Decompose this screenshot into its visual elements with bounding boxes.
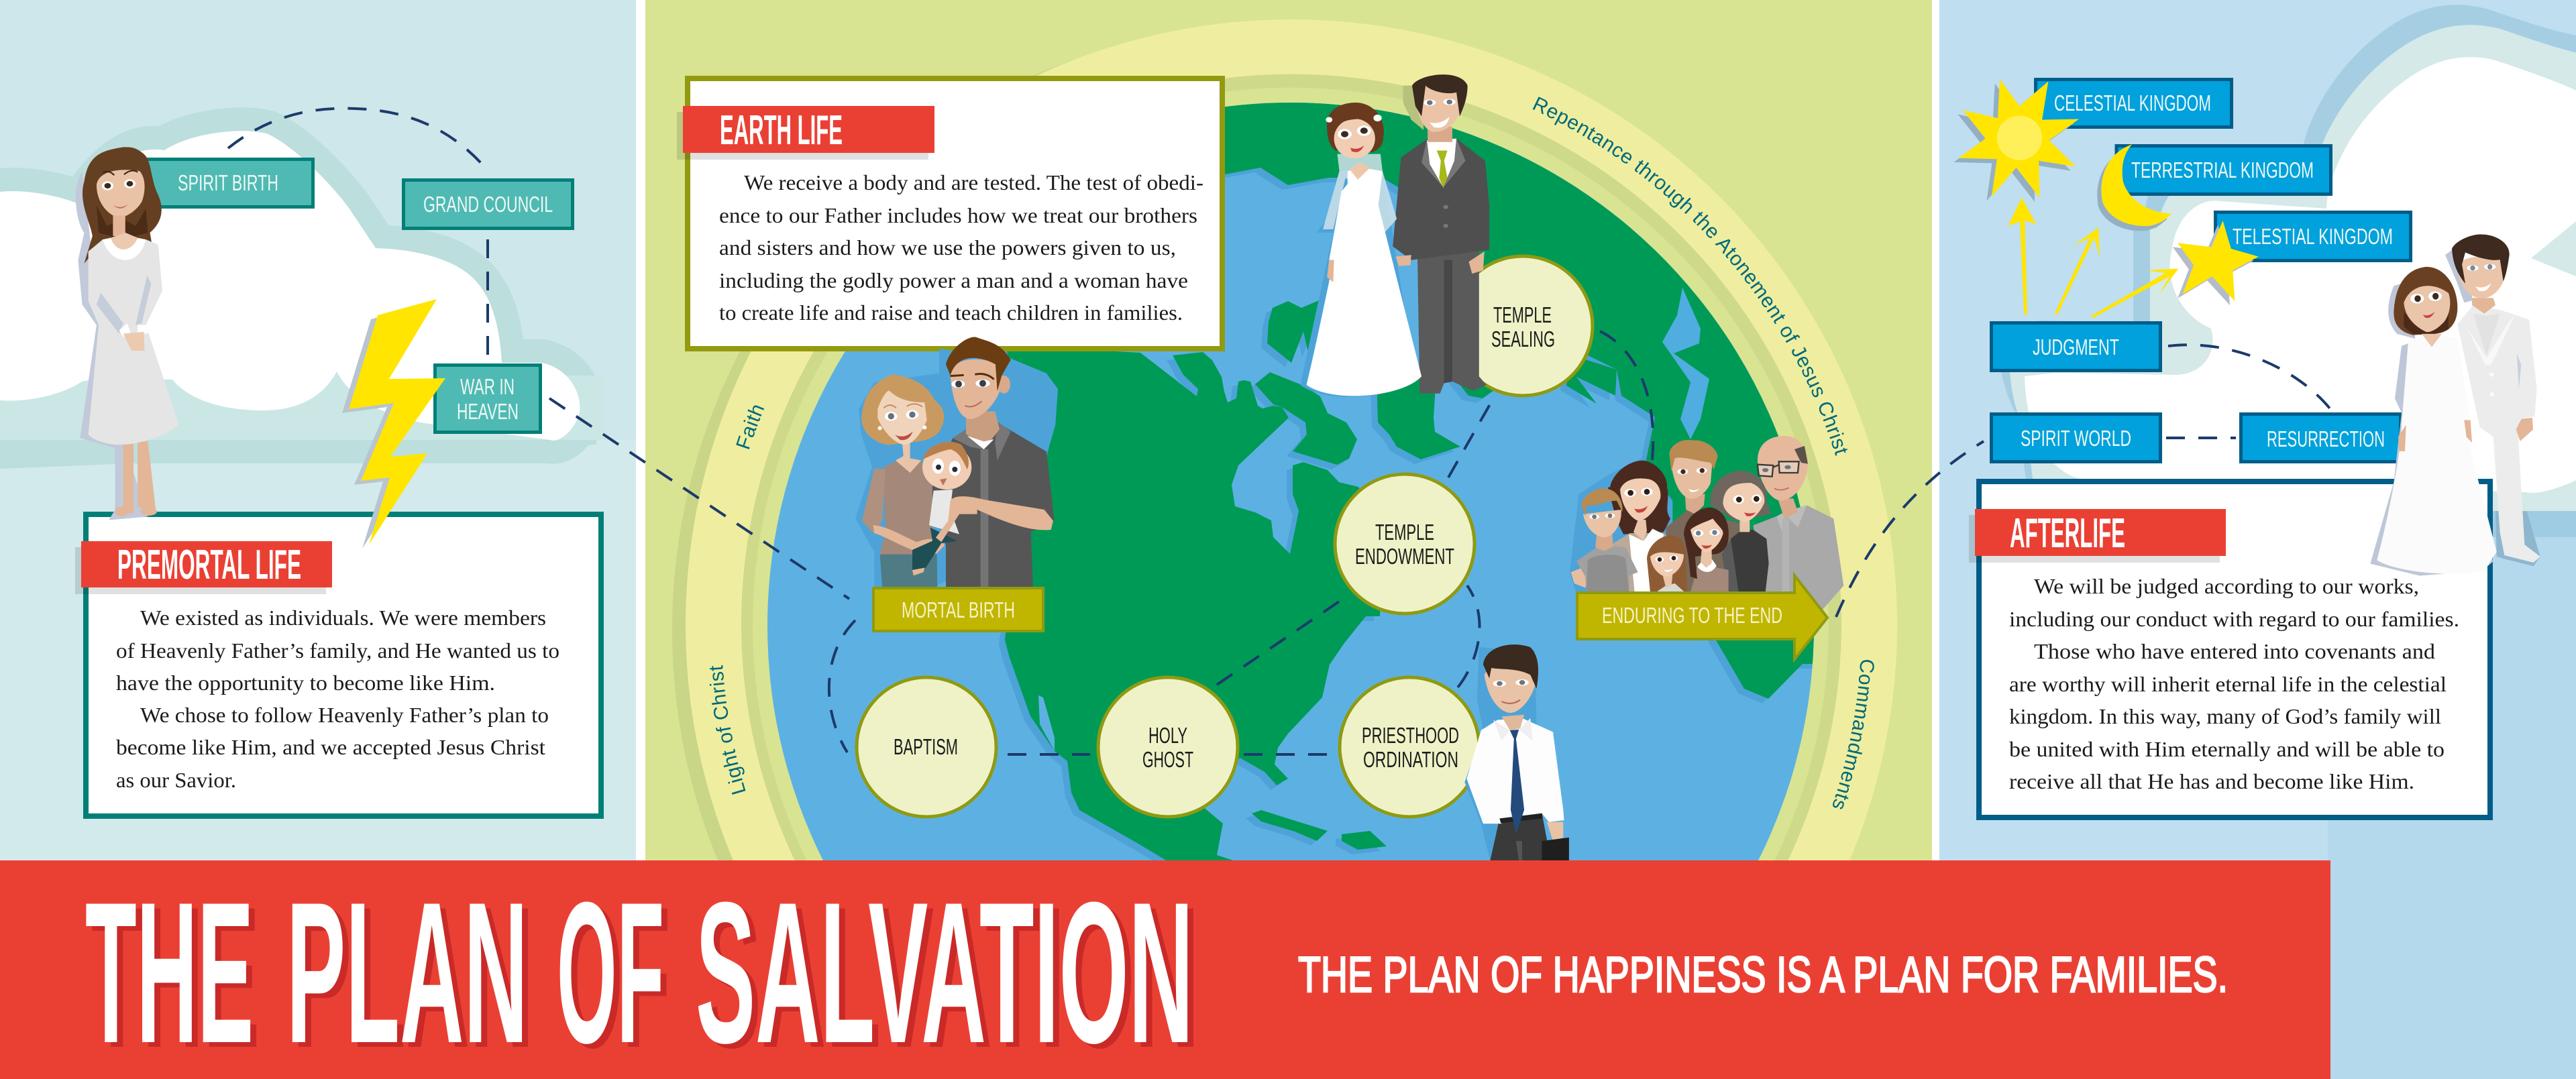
panel: earth life text box: including the godly power a man and a woman have: [719, 268, 1188, 292]
ring label: Commandments: Commandments: [1833, 660, 1874, 809]
panel: earth life text box: We receive a body and are tested. The test of obedi-: [744, 170, 1203, 194]
icons: sun, moon, star and arrows: [1953, 79, 2259, 318]
circle: temple sealing: SEALING: [1491, 327, 1555, 351]
circle: holy ghost: HOLY: [1148, 723, 1187, 748]
panel: premortal background: [0, 0, 636, 872]
figure: extended family: [1570, 436, 1843, 612]
box: spirit birth: [144, 160, 313, 207]
panel: earth life text box: and sisters and how we use the powers given to us,: [719, 235, 1176, 260]
circle: priesthood ordination: ORDINATION: [1363, 747, 1458, 772]
circle: baptism: [857, 677, 996, 817]
title: the plan of salvation: THE: [85, 860, 254, 1079]
ring label: Light of Christ: Light of Christ: [710, 665, 746, 795]
box: mortal birth: [873, 588, 1043, 631]
panel: afterlife text box: kingdom. In this way, many of God’s family will: [2009, 704, 2441, 728]
box: spirit world: SPIRIT WORLD: [2021, 426, 2131, 451]
banner: title strip: [0, 860, 2330, 1079]
box: grand council: [404, 180, 573, 228]
box: celestial kingdom: CELESTIAL KINGDOM: [2054, 91, 2211, 115]
box: resurrection: RESURRECTION: [2267, 427, 2385, 451]
globe land masses: [999, 94, 1878, 870]
panel: afterlife text box: We will be judged according to our works,: [2034, 574, 2419, 598]
panel: premortal life text box: become like Him, and we accepted Jesus Christ: [116, 735, 545, 759]
panel: afterlife background: [1939, 0, 2576, 1079]
box: spirit birth: SPIRIT BIRTH: [178, 170, 278, 195]
subtitle: plan for families: THE PLAN OF HAPPINESS IS A PLAN FOR FAMILIES.: [1298, 946, 2228, 1003]
figure: couple in white: [2370, 234, 2540, 576]
arrow: enduring to the end: [1577, 575, 1827, 659]
box: celestial kingdom: [2035, 79, 2231, 127]
circle: temple endowment: TEMPLE: [1375, 520, 1434, 545]
circle: priesthood ordination: [1340, 677, 1479, 817]
panel: afterlife text box: receive all that He has and become like Him.: [2009, 769, 2414, 793]
box: spirit world: [1991, 414, 2160, 461]
circle: temple sealing: TEMPLE: [1493, 302, 1552, 327]
title shadow: [91, 864, 1199, 1079]
panel: earth life text box: [677, 78, 1222, 349]
icon: lightning bolt: [342, 299, 445, 549]
panel: premortal life text box: We existed as individuals. We were members: [140, 606, 546, 630]
ring label: Faith: Faith: [736, 405, 765, 449]
dashed connector lines: [228, 109, 2330, 754]
panel: afterlife text box: be united with Him eternally and will be able to: [2009, 737, 2445, 761]
box: war in heaven: WAR IN: [460, 374, 515, 399]
panel: afterlife text box: Those who have entered into covenants and: [2034, 639, 2435, 663]
circle: holy ghost: [1098, 677, 1238, 817]
title: the plan of salvation: PLAN: [286, 860, 528, 1079]
figure: bride and groom: [1300, 74, 1489, 397]
figure: young man with briefcase: [1464, 644, 1569, 860]
box: grand council: GRAND COUNCIL: [423, 192, 553, 217]
panel: earth life text box: EARTH LIFE: [720, 107, 843, 154]
panel: earth life background: [645, 0, 1932, 872]
panel: premortal life text box: of Heavenly Father’s family, and He wanted us to: [116, 638, 559, 663]
box: judgment: [1991, 323, 2160, 370]
panel: afterlife text box: [1969, 481, 2490, 817]
title: the plan of salvation: OF: [557, 860, 664, 1079]
box: war in heaven: HEAVEN: [457, 399, 519, 424]
circle: temple endowment: [1335, 474, 1474, 614]
banner: title strip: SALVATION: [696, 860, 1193, 1079]
box: mortal birth: MORTAL BIRTH: [902, 598, 1015, 622]
panel: afterlife text box: are worthy will inherit eternal life in the celestial: [2009, 672, 2447, 696]
panel: premortal life text box: [75, 514, 601, 816]
panel: afterlife text box: including our conduct with regard to our families.: [2009, 607, 2459, 631]
arrow: enduring to the end: ENDURING TO THE END: [1602, 603, 1782, 628]
panel: premortal life text box: have the opportunity to become like Him.: [116, 671, 495, 695]
figure: premortal woman: [76, 147, 178, 520]
box: telestial kingdom: TELESTIAL KINGDOM: [2233, 224, 2393, 249]
box: resurrection: [2241, 414, 2400, 461]
panel: afterlife text box: AFTERLIFE: [2010, 510, 2125, 557]
box: terrestrial kingdom: [2116, 146, 2330, 194]
title: the plan of salvation: [85, 860, 1193, 1079]
circle: temple sealing: [1453, 256, 1593, 396]
panel: premortal life text box: We chose to follow Heavenly Father’s plan to: [140, 703, 549, 727]
figure: young family with baby: [855, 337, 1058, 587]
box: judgment: JUDGMENT: [2033, 335, 2119, 359]
panel: premortal life text box: as our Savior.: [116, 768, 236, 792]
panel: earth life text box: ence to our Father includes how we treat our brothers: [719, 203, 1197, 227]
box: war in heaven: [435, 365, 541, 432]
circle: baptism: BAPTISM: [894, 734, 958, 759]
ring label: Repentance through the Atonement of Jesus Christ: Repentance through the Atonement of Jesus Christ: [1532, 97, 1847, 456]
circle: temple endowment: ENDOWMENT: [1355, 544, 1454, 569]
panel: earth life text box: to create life and raise and teach children in families.: [719, 300, 1183, 325]
box: terrestrial kingdom: TERRESTRIAL KINGDOM: [2131, 158, 2314, 182]
panel: premortal life text box: PREMORTAL LIFE: [117, 542, 301, 588]
box: telestial kingdom: [2215, 212, 2411, 260]
circle: priesthood ordination: PRIESTHOOD: [1362, 723, 1459, 748]
circle: holy ghost: GHOST: [1142, 747, 1193, 772]
